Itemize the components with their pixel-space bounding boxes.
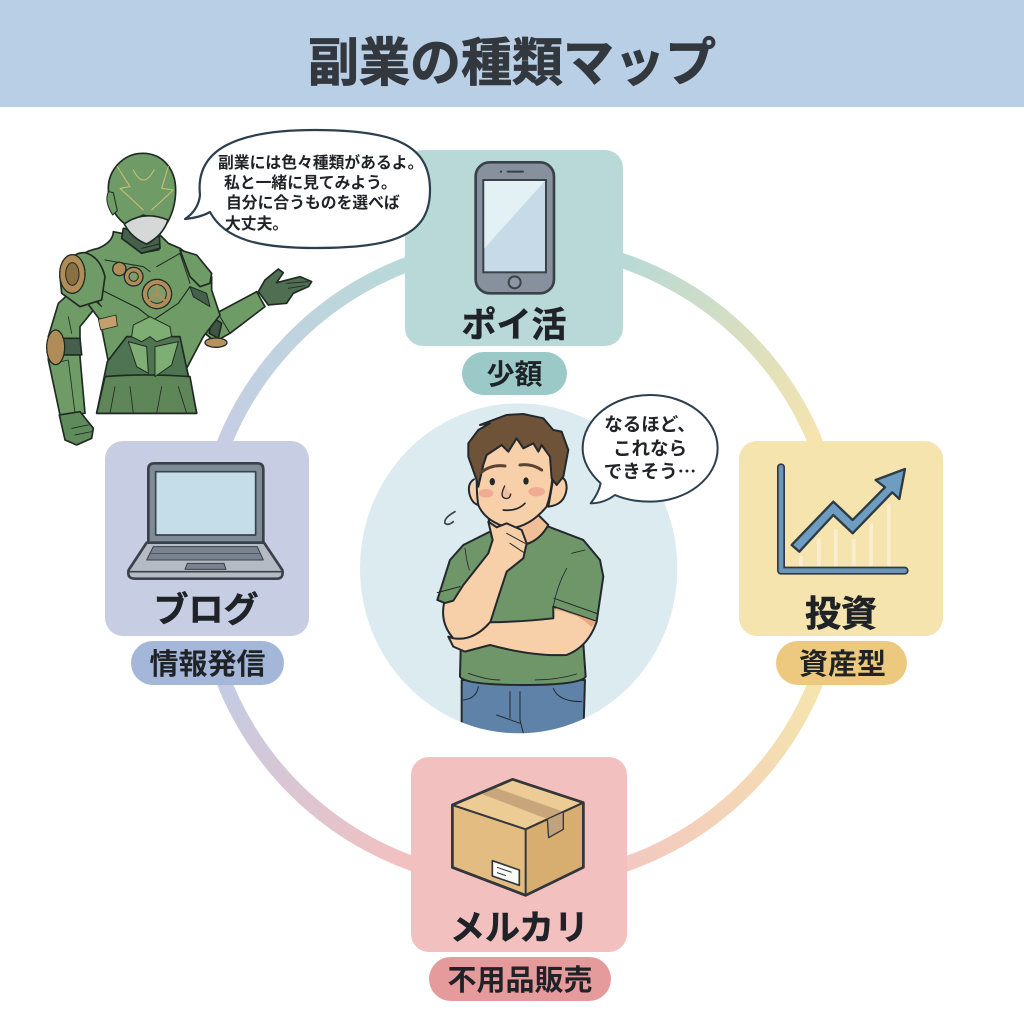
panel: ポイ活 — [405, 150, 623, 346]
robot: torso and legs — [63, 232, 220, 413]
speech text: robot: 私と一緒に見てみよう。 — [224, 174, 397, 192]
robot: near arm — [48, 287, 102, 415]
robot: shoulders — [60, 253, 105, 307]
speech text: man: なるほど、 — [604, 411, 696, 437]
label: ブログ: ブログ — [153, 590, 259, 630]
robot: hand — [258, 269, 312, 305]
pill: 情報発信 — [131, 641, 284, 685]
speech bubble: man — [583, 395, 718, 503]
label: メルカリ: メルカリ — [450, 909, 589, 948]
robot: helmet — [108, 153, 176, 224]
robot: mask — [124, 216, 168, 244]
pill: 資産型 — [776, 641, 907, 685]
header band — [0, 0, 1024, 107]
speech text: robot: 自分に合うものを選べば — [226, 194, 400, 212]
robot: fist — [59, 412, 93, 445]
speech text: man: これなら — [613, 435, 687, 461]
speech text: robot: 副業には色々種類があるよ。 — [218, 153, 423, 172]
man: brows, eyes, nose, mouth — [479, 465, 545, 510]
pill: 不用品販売: 不用品販売 — [447, 964, 593, 997]
speech bubble: robot — [185, 130, 430, 248]
icon: smartphone — [476, 162, 554, 293]
speech text: man: できそう… — [604, 458, 696, 484]
label: 投資: 投資 — [805, 593, 877, 634]
man: left ear — [469, 479, 478, 505]
robot: chest gears — [113, 262, 172, 309]
man: jeans — [462, 680, 585, 737]
pill: 資産型: 資産型 — [799, 648, 886, 681]
panel: メルカリ — [411, 757, 627, 952]
icon: rising chart — [781, 467, 905, 571]
center illustration: thinking man — [360, 395, 718, 737]
cycle ring — [218, 254, 822, 872]
man: neck — [488, 513, 548, 544]
man: ear — [548, 477, 567, 507]
man: face — [477, 433, 554, 528]
man: arm and hand on chin — [443, 522, 527, 639]
panel: ブログ — [105, 441, 309, 636]
robot: arm joint — [209, 317, 222, 338]
man: hair — [468, 414, 568, 487]
robot: neck — [122, 228, 160, 253]
title: 副業の種類マップ — [308, 35, 716, 93]
speech text: man — [604, 411, 696, 484]
speech text: robot — [218, 153, 423, 233]
pill: 少額 — [462, 352, 567, 395]
man: shirt — [437, 526, 603, 685]
man: crossed forearm — [448, 607, 597, 655]
robot: far arm — [205, 292, 265, 342]
icon: laptop — [128, 463, 283, 579]
pill: 少額: 少額 — [486, 359, 543, 390]
icon: cardboard box — [452, 779, 583, 895]
pill: 不用品販売 — [429, 957, 611, 1001]
robot: chest plates — [102, 287, 190, 320]
speech text: robot: 大丈夫。 — [225, 214, 288, 233]
robot: left elbow gear — [47, 330, 65, 365]
man: sweat mark — [445, 512, 455, 524]
character: green armored robot — [47, 153, 312, 445]
label: ポイ活: ポイ活 — [461, 306, 567, 345]
pill: 情報発信: 情報発信 — [149, 648, 266, 681]
panel: 投資 — [739, 441, 943, 636]
